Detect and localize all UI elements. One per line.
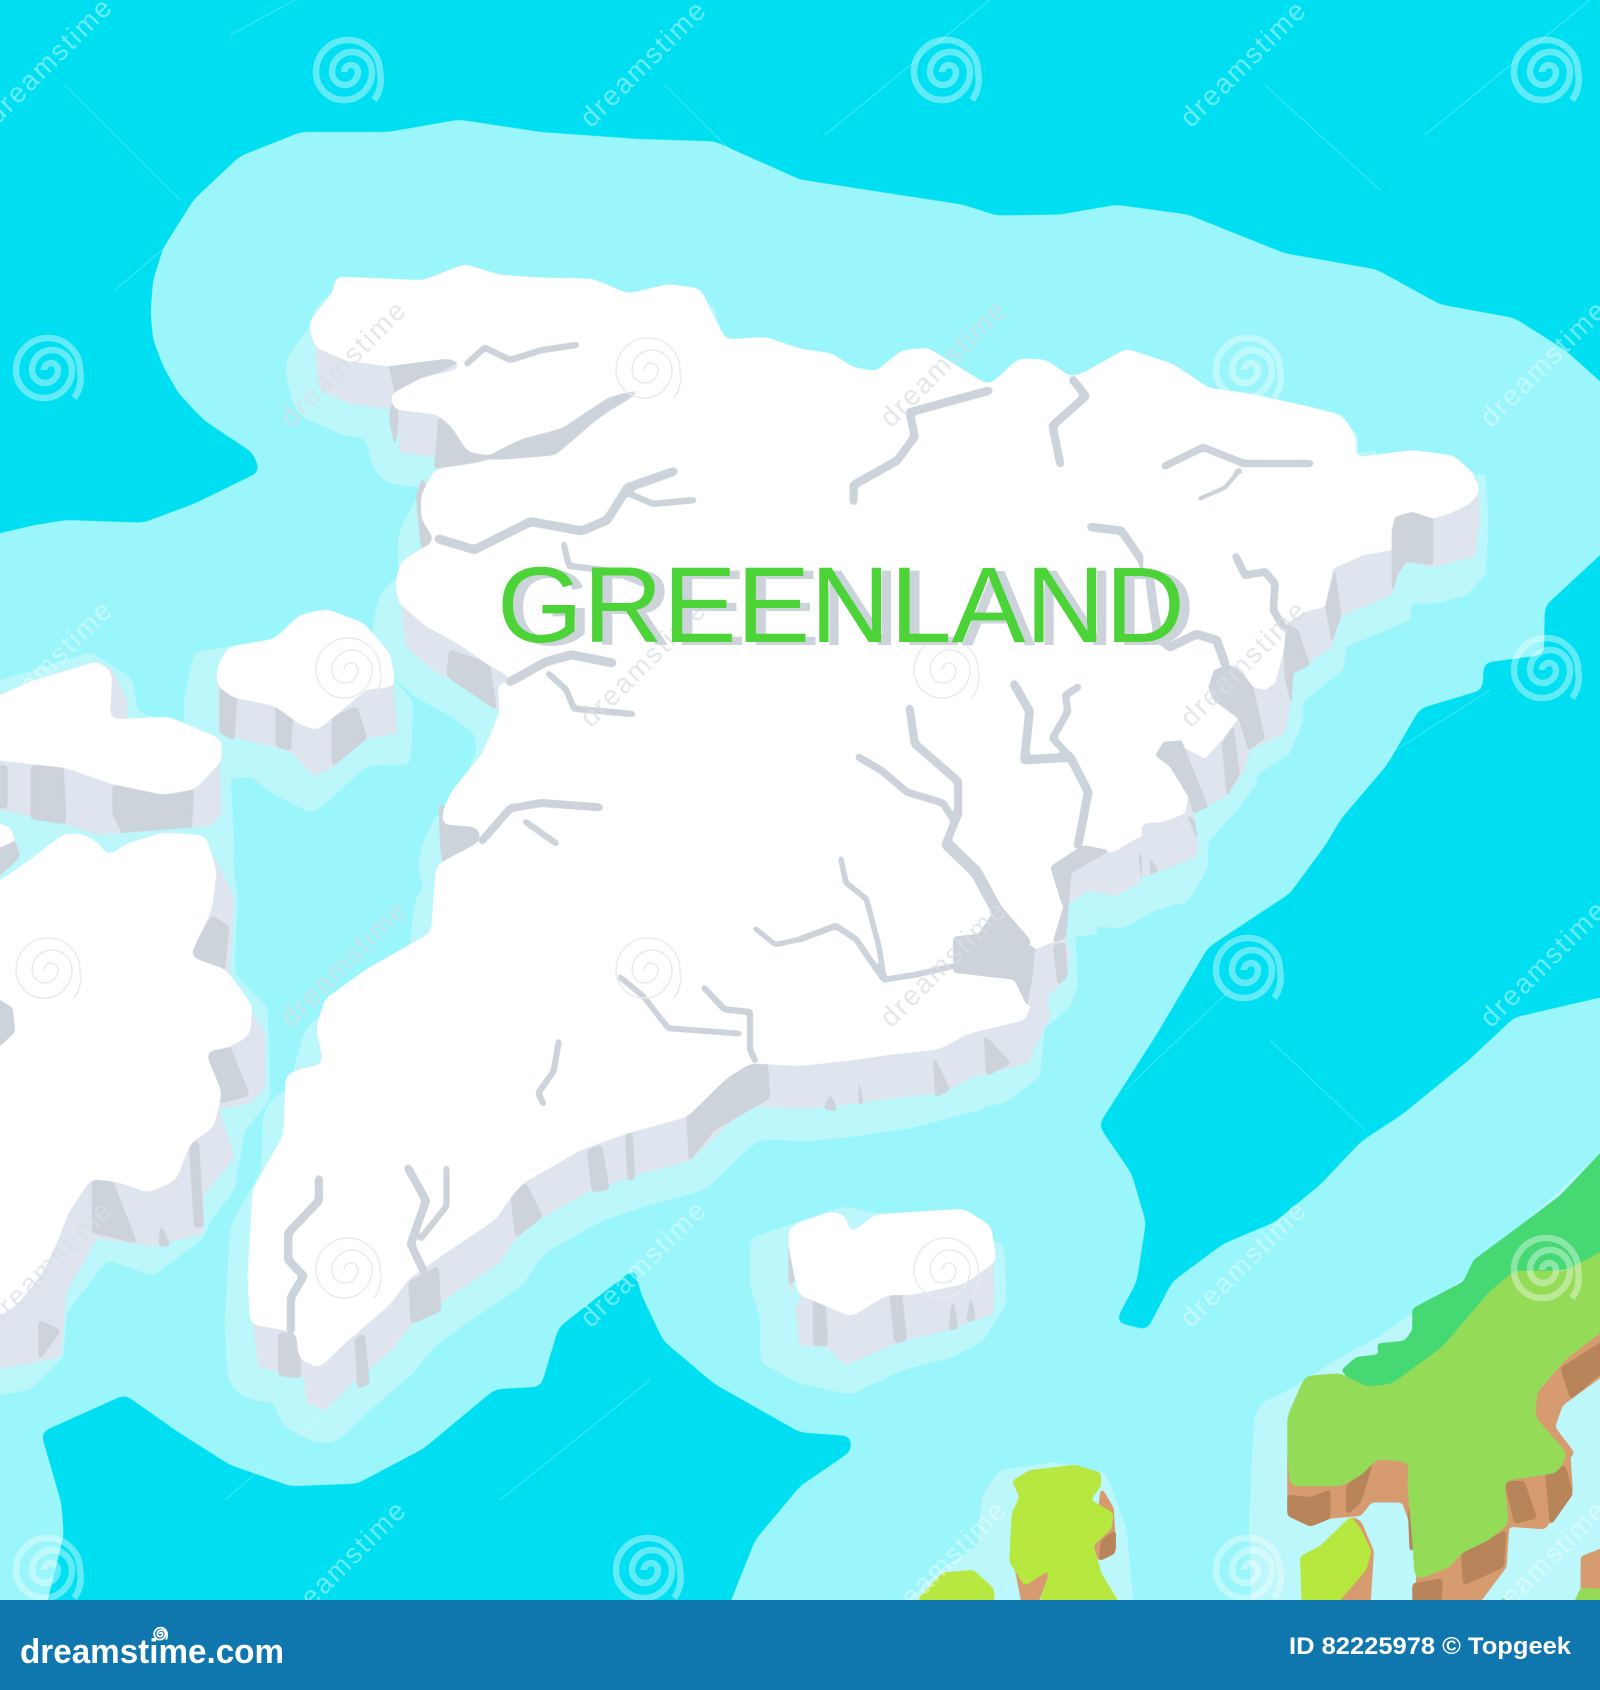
image id and credit: ID 82225978 © Topgeek: [1289, 1633, 1572, 1660]
island halo: [0, 652, 235, 862]
dark cliff strip: [1098, 1529, 1116, 1562]
footer logo text: dreamstime.com: [20, 1633, 284, 1671]
watermark text on ice: dreamstime: [274, 294, 413, 433]
dark green highlands: [1341, 1114, 1600, 1387]
far right island: [1560, 1535, 1600, 1632]
ice sheet top surface: [250, 267, 1476, 1365]
east coast ice top: [1143, 473, 1478, 824]
watermark text on water: dreamstime: [874, 1494, 1013, 1633]
dark strip on that cliff: [1053, 942, 1068, 986]
watermark text on ice: [0, 294, 1313, 1333]
east coast detail: [1142, 471, 1503, 904]
watermark text on ice: dreamstime: [574, 594, 713, 733]
watermark text on water: dreamstime: [274, 1494, 413, 1633]
south-west cracks: [288, 929, 800, 1330]
panel: south iceberg: [750, 1206, 1007, 1395]
east coast cracks: [1150, 471, 1283, 664]
light green lowlands: [1287, 1233, 1600, 1581]
footer background: [0, 1600, 1600, 1690]
island cliffs: [1014, 1486, 1116, 1632]
island side: [0, 666, 222, 845]
island top: [219, 612, 393, 728]
watermark text on ice: dreamstime: [1174, 594, 1313, 733]
bottom left islet: [887, 1570, 996, 1632]
watermark text on water: dreamstime: [1174, 1194, 1313, 1333]
north-west cracks: [439, 345, 694, 843]
island halo: [0, 825, 270, 1401]
iceberg top: [791, 1211, 994, 1314]
panel: small island west of Greenland: [184, 612, 413, 814]
watermark text on ice: dreamstime: [874, 294, 1013, 433]
top: [1300, 1516, 1371, 1632]
top: [1560, 1588, 1600, 1632]
dark cliff strips and gaps: [278, 358, 1152, 1389]
island top: [0, 664, 219, 792]
watermark text on water: dreamstime: [574, 1194, 713, 1333]
land halo: [1249, 1120, 1600, 1632]
island side shading: [38, 915, 250, 1362]
dark brown cliff strips: [1287, 1319, 1600, 1632]
east coast cliff side: [1142, 480, 1480, 877]
title: Greenland: [497, 544, 1195, 668]
footer bar: [0, 1600, 1600, 1690]
cliff: [1336, 1516, 1374, 1632]
small ice fragment: [0, 830, 20, 895]
small ice fragment top: [0, 819, 15, 854]
island side: [218, 668, 398, 776]
south-east cracks: [800, 845, 1024, 980]
island halo: [184, 641, 413, 814]
panel: land bottom right: [1249, 1114, 1600, 1632]
panel: large west island: [0, 819, 270, 1401]
east coast shelf water: [1143, 473, 1503, 904]
watermark spirals on ice: [16, 338, 979, 1298]
gray inlets on top of the ice: [953, 845, 1111, 1007]
title text: GREENLAND: [497, 544, 1185, 665]
east coast ice-water halo: [1142, 473, 1488, 904]
halo: [877, 1462, 1137, 1632]
brown cliffs: [1287, 1303, 1600, 1632]
small island right of center: [1300, 1516, 1374, 1632]
island top: [1009, 1465, 1137, 1632]
ice cliff sides: [252, 283, 1481, 1411]
iceberg halo: [750, 1206, 1007, 1395]
east coast dark strips: [1150, 512, 1433, 875]
panel: left edge island: [0, 652, 235, 862]
light cliff beside the inlet: [1027, 942, 1070, 1007]
island top: [0, 835, 250, 1331]
watermark text on ice: dreamstime: [274, 894, 413, 1033]
cliff: [1581, 1535, 1600, 1632]
island side shading: [0, 765, 194, 845]
ice cracks: [288, 345, 1310, 1330]
tiny islet: [1479, 1596, 1519, 1632]
footer logo spiral: [154, 1628, 167, 1640]
iceberg side: [788, 1244, 994, 1365]
panel: Greenland ice sheet: [250, 267, 1503, 1411]
panel: lower center islands: [877, 1462, 1137, 1632]
north-east cracks: [854, 380, 1310, 845]
halo: shallow ice water around Greenland: [255, 313, 1481, 1411]
title shadow: GREENLAND: [507, 547, 1195, 668]
iceberg side shading: [788, 1244, 976, 1346]
island side: [0, 856, 265, 1374]
island side shading: [219, 684, 367, 768]
watermark text on ice: dreamstime: [874, 894, 1013, 1033]
west inlet: [0, 991, 15, 1061]
shelf water trimming the east side of the halo: [712, 302, 1524, 1180]
